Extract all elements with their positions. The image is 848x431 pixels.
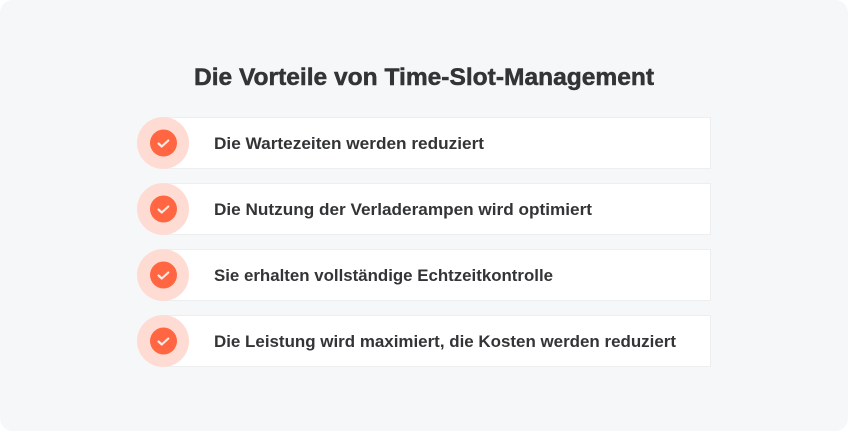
card <box>164 184 710 234</box>
list item: reduced waiting times <box>137 117 710 169</box>
list item: real-time control <box>137 249 710 301</box>
list item: optimised loading ramps <box>137 183 710 235</box>
icon: check mark <box>137 249 189 301</box>
item text: Sie erhalten vollständige Echtzeitkontrolle <box>214 266 553 285</box>
item text: Die Leistung wird maximiert, die Kosten werden reduziert <box>214 332 676 351</box>
card <box>164 250 710 300</box>
icon: check mark <box>137 315 189 367</box>
card <box>164 118 710 168</box>
title: Die Vorteile von Time-Slot-Management <box>194 64 654 91</box>
item text: Die Nutzung der Verladerampen wird optimiert <box>214 200 592 219</box>
icon: check mark <box>137 117 189 169</box>
list item: performance and costs <box>137 315 710 367</box>
icon: check mark <box>137 183 189 235</box>
item text: Die Wartezeiten werden reduziert <box>214 134 484 153</box>
card <box>164 316 710 366</box>
